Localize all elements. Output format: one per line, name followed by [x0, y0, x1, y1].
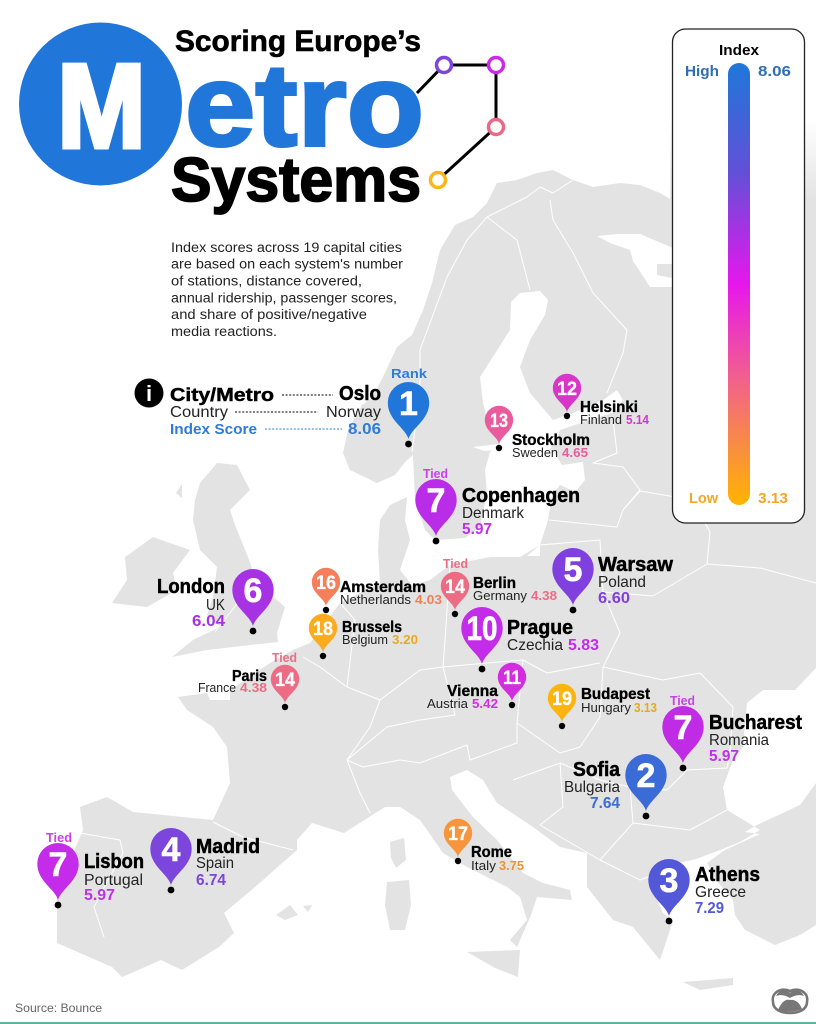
city: Madrid: 6.74 — [196, 872, 226, 889]
description text — [171, 240, 404, 339]
city: London: UK — [206, 597, 225, 614]
city: Amsterdam: Netherlands — [340, 592, 411, 607]
city: Lisbon: 7 — [49, 846, 67, 884]
description text: and share of positive/negative — [171, 307, 367, 322]
icon: info — [134, 378, 164, 408]
city: London: 6 — [244, 572, 262, 610]
city: Paris: Tied — [272, 650, 297, 665]
description text: Index scores across 19 capital cities — [171, 240, 402, 255]
city: Athens: Athens — [695, 864, 760, 886]
city: Athens: Greece — [695, 884, 746, 901]
legend: how to read: Country — [170, 404, 228, 421]
city: Budapest: Hungary — [581, 700, 632, 715]
city: Brussels: Belgium — [342, 632, 388, 647]
city: Athens — [648, 859, 760, 924]
city: Bucharest — [662, 693, 802, 771]
city: Rome: 3.75 — [499, 858, 524, 873]
title: M — [58, 40, 146, 173]
city: Sofia: Bulgaria — [564, 779, 620, 796]
legend panel: index: Low — [689, 491, 719, 507]
city: Copenhagen: Tied — [423, 466, 448, 481]
description text: annual ridership, passenger scores, — [171, 290, 397, 306]
city: Paris: 14 — [275, 670, 295, 691]
title — [19, 22, 424, 215]
icon: logo — [773, 990, 807, 1013]
title: Scoring Europe’s — [175, 25, 421, 58]
city: Madrid: Madrid — [196, 836, 260, 858]
city: Paris — [198, 650, 299, 710]
city: London: London — [157, 576, 225, 598]
legend: how to read: Index Score — [170, 422, 257, 438]
city: Lisbon: Tied — [46, 830, 72, 845]
description text: are based on each system's number — [171, 256, 404, 272]
city: Berlin: Germany — [473, 588, 527, 603]
city: Lisbon: Portugal — [84, 872, 143, 889]
city: Athens: 3 — [660, 862, 678, 900]
city: Paris: France — [198, 680, 236, 695]
city: Warsaw: 6.60 — [598, 590, 630, 607]
city: Copenhagen: Copenhagen — [462, 485, 580, 507]
city: Vienna: Austria — [427, 696, 469, 711]
city: Amsterdam: Amsterdam — [340, 579, 426, 596]
city: Warsaw: 5 — [564, 551, 582, 589]
city: Oslo: 1 — [399, 385, 418, 423]
city: Budapest: Budapest — [581, 686, 650, 703]
city: Budapest: 3.13 — [634, 700, 657, 715]
city: Vienna: 5.42 — [472, 696, 498, 711]
city: Oslo: 8.06 — [348, 421, 381, 438]
city: Sofia: 2 — [637, 757, 655, 795]
city: Berlin: Berlin — [473, 575, 516, 592]
city: Bucharest: Bucharest — [709, 712, 802, 734]
description text: of stations, distance covered, — [171, 274, 362, 288]
description text: media reactions. — [171, 324, 277, 339]
city: Berlin — [441, 556, 557, 617]
city: Bucharest: 7 — [674, 709, 692, 747]
city: Stockholm: 13 — [490, 411, 508, 432]
city: Copenhagen: 7 — [427, 482, 445, 520]
title: etro — [185, 40, 424, 170]
bottom bar — [0, 1022, 816, 1024]
city: Bucharest: Romania — [709, 732, 769, 749]
city: Oslo — [326, 366, 429, 447]
city: Bucharest: Tied — [670, 693, 695, 708]
city: Warsaw: Warsaw — [598, 554, 673, 576]
city: Warsaw: Poland — [598, 574, 646, 591]
legend: how to read: City/Metro — [170, 384, 274, 405]
city: Helsinki: 5.14 — [626, 412, 650, 427]
title: Systems — [171, 146, 421, 215]
city: Berlin: 14 — [445, 577, 465, 598]
icon: info: i — [146, 381, 152, 406]
city: Helsinki — [553, 374, 650, 427]
city: Prague — [461, 607, 599, 672]
city: Oslo: Rank — [391, 366, 428, 381]
city: Lisbon: Lisbon — [84, 851, 144, 873]
legend: how to read — [134, 378, 342, 438]
city: Rome: Rome — [471, 844, 512, 861]
city: Sofia: Sofia — [573, 759, 621, 781]
city: Helsinki: Helsinki — [580, 399, 638, 416]
city: Prague: Prague — [507, 617, 573, 639]
city: Rome — [444, 819, 524, 873]
city: Helsinki: 12 — [557, 379, 577, 400]
city: Budapest — [548, 684, 657, 729]
city: Rome: 17 — [448, 824, 468, 845]
city: Bucharest: 5.97 — [709, 748, 739, 765]
legend panel: index: High — [685, 64, 719, 80]
city: Oslo: Norway — [326, 404, 381, 421]
city: Stockholm: 4.65 — [562, 445, 588, 460]
city: Prague: 5.83 — [568, 637, 599, 654]
city: Helsinki: Finland — [580, 412, 622, 427]
city: Prague: Czechia — [507, 637, 563, 654]
city: Vienna: 11 — [503, 668, 521, 689]
city: London: 6.04 — [192, 613, 225, 630]
city: London — [157, 569, 274, 634]
city: Brussels: 3.20 — [392, 632, 418, 647]
city: Berlin: 4.38 — [531, 588, 557, 603]
city: Amsterdam: 16 — [316, 573, 336, 594]
city: Prague: 10 — [466, 610, 498, 648]
city: Copenhagen: 5.97 — [462, 521, 492, 538]
city: Stockholm — [485, 406, 590, 460]
city: Madrid: Spain — [196, 855, 234, 872]
legend panel: index: Index — [719, 43, 759, 59]
city: Paris: Paris — [232, 668, 267, 685]
city: Sofia — [564, 754, 667, 819]
city: Brussels: 18 — [313, 619, 333, 640]
city: Amsterdam: 4.03 — [415, 592, 442, 607]
metro line graphic — [417, 58, 504, 188]
city: Amsterdam — [312, 568, 442, 613]
city: Paris: 4.38 — [240, 680, 267, 695]
city: Stockholm: Sweden — [512, 445, 558, 460]
city: Oslo: Oslo — [339, 383, 381, 405]
map of Europe — [57, 120, 816, 990]
city: Sofia: 7.64 — [590, 795, 620, 812]
legend panel: index — [672, 29, 804, 523]
city: Madrid: 4 — [162, 831, 181, 869]
legend panel: index: 8.06 — [758, 64, 791, 80]
city: Lisbon: 5.97 — [84, 887, 115, 904]
city: Vienna: Vienna — [447, 683, 498, 700]
legend panel: index: 3.13 — [758, 491, 788, 507]
city: Athens: 7.29 — [695, 900, 724, 917]
city: Berlin: Tied — [443, 556, 468, 571]
city: Madrid — [150, 828, 260, 893]
city: Stockholm: Stockholm — [512, 432, 590, 449]
city: Copenhagen: Denmark — [462, 505, 525, 522]
city: Warsaw — [552, 548, 673, 613]
city: Brussels — [309, 614, 418, 659]
city: Budapest: 19 — [552, 689, 572, 710]
city: Vienna — [427, 663, 526, 711]
city: Lisbon — [37, 830, 144, 908]
city: Brussels: Brussels — [342, 619, 402, 636]
source: Source: Bounce — [15, 1001, 102, 1015]
city: Copenhagen — [415, 466, 580, 544]
city: Rome: Italy — [471, 858, 497, 873]
